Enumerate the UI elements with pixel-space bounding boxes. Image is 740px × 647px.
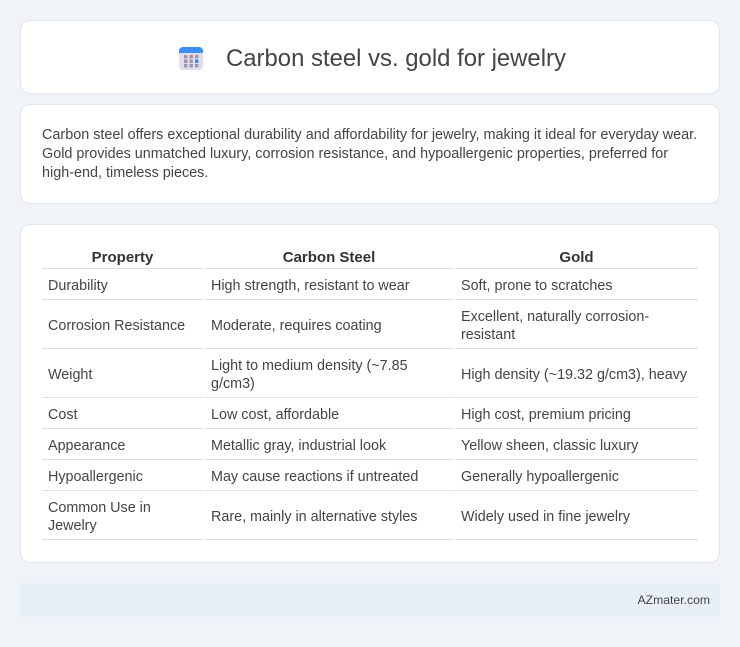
cell: g/cm3) (211, 376, 255, 392)
title: Carbon steel vs. gold for jewelry (226, 45, 566, 72)
cell (211, 358, 408, 392)
row: Hypoallergenic: Hypoallergenic (48, 469, 143, 485)
panel: comparison table (20, 224, 720, 563)
footer brand text: AZmater.com (638, 593, 710, 607)
cell: Moderate, requires coating (211, 318, 382, 334)
cell: High cost, premium pricing (461, 407, 631, 423)
table header: Carbon Steel: Carbon Steel (283, 249, 375, 266)
icon: calendar (179, 47, 203, 70)
panel: title card (20, 20, 720, 94)
cell: May cause reactions if untreated (211, 469, 418, 485)
row: Weight: Weight (48, 367, 92, 383)
cell: Yellow sheen, classic luxury (461, 438, 638, 454)
cell: Metallic gray, industrial look (211, 438, 386, 454)
row: Durability: Durability (48, 278, 108, 294)
footer bar (20, 583, 720, 617)
cell: High density (~19.32 g/cm3), heavy (461, 367, 687, 383)
row: Cost: Cost (48, 407, 78, 423)
cell: resistant (461, 327, 515, 343)
cell: Generally hypoallergenic (461, 469, 619, 485)
panel: summary card (20, 104, 720, 204)
table header: Property: Property (92, 249, 153, 266)
row: Appearance: Appearance (48, 438, 125, 454)
cell: Excellent, naturally corrosion- (461, 309, 649, 325)
cell: Widely used in fine jewelry (461, 509, 630, 525)
row: Common Use in Jewelry (48, 500, 151, 534)
row: Corrosion Resistance: Corrosion Resistance (48, 318, 185, 334)
cell: High strength, resistant to wear (211, 278, 410, 294)
cell: Low cost, affordable (211, 407, 339, 423)
row: Common Use in Jewelry: Common Use in (48, 500, 151, 516)
summary text: high-end, timeless pieces. (42, 165, 208, 181)
row: Common Use in Jewelry: Jewelry (48, 518, 97, 534)
cell (461, 309, 649, 343)
summary text (42, 127, 697, 181)
summary text: Gold provides unmatched luxury, corrosion resistance, and hypoallergenic properties, preferred for (42, 146, 668, 162)
cell: Rare, mainly in alternative styles (211, 509, 417, 525)
cell: Soft, prone to scratches (461, 278, 612, 294)
table header: Gold: Gold (559, 249, 594, 266)
cell: Light to medium density (~7.85 (211, 358, 408, 374)
summary text: Carbon steel offers exceptional durability and affordability for jewelry, making it ideal for everyday wear. (42, 127, 697, 143)
